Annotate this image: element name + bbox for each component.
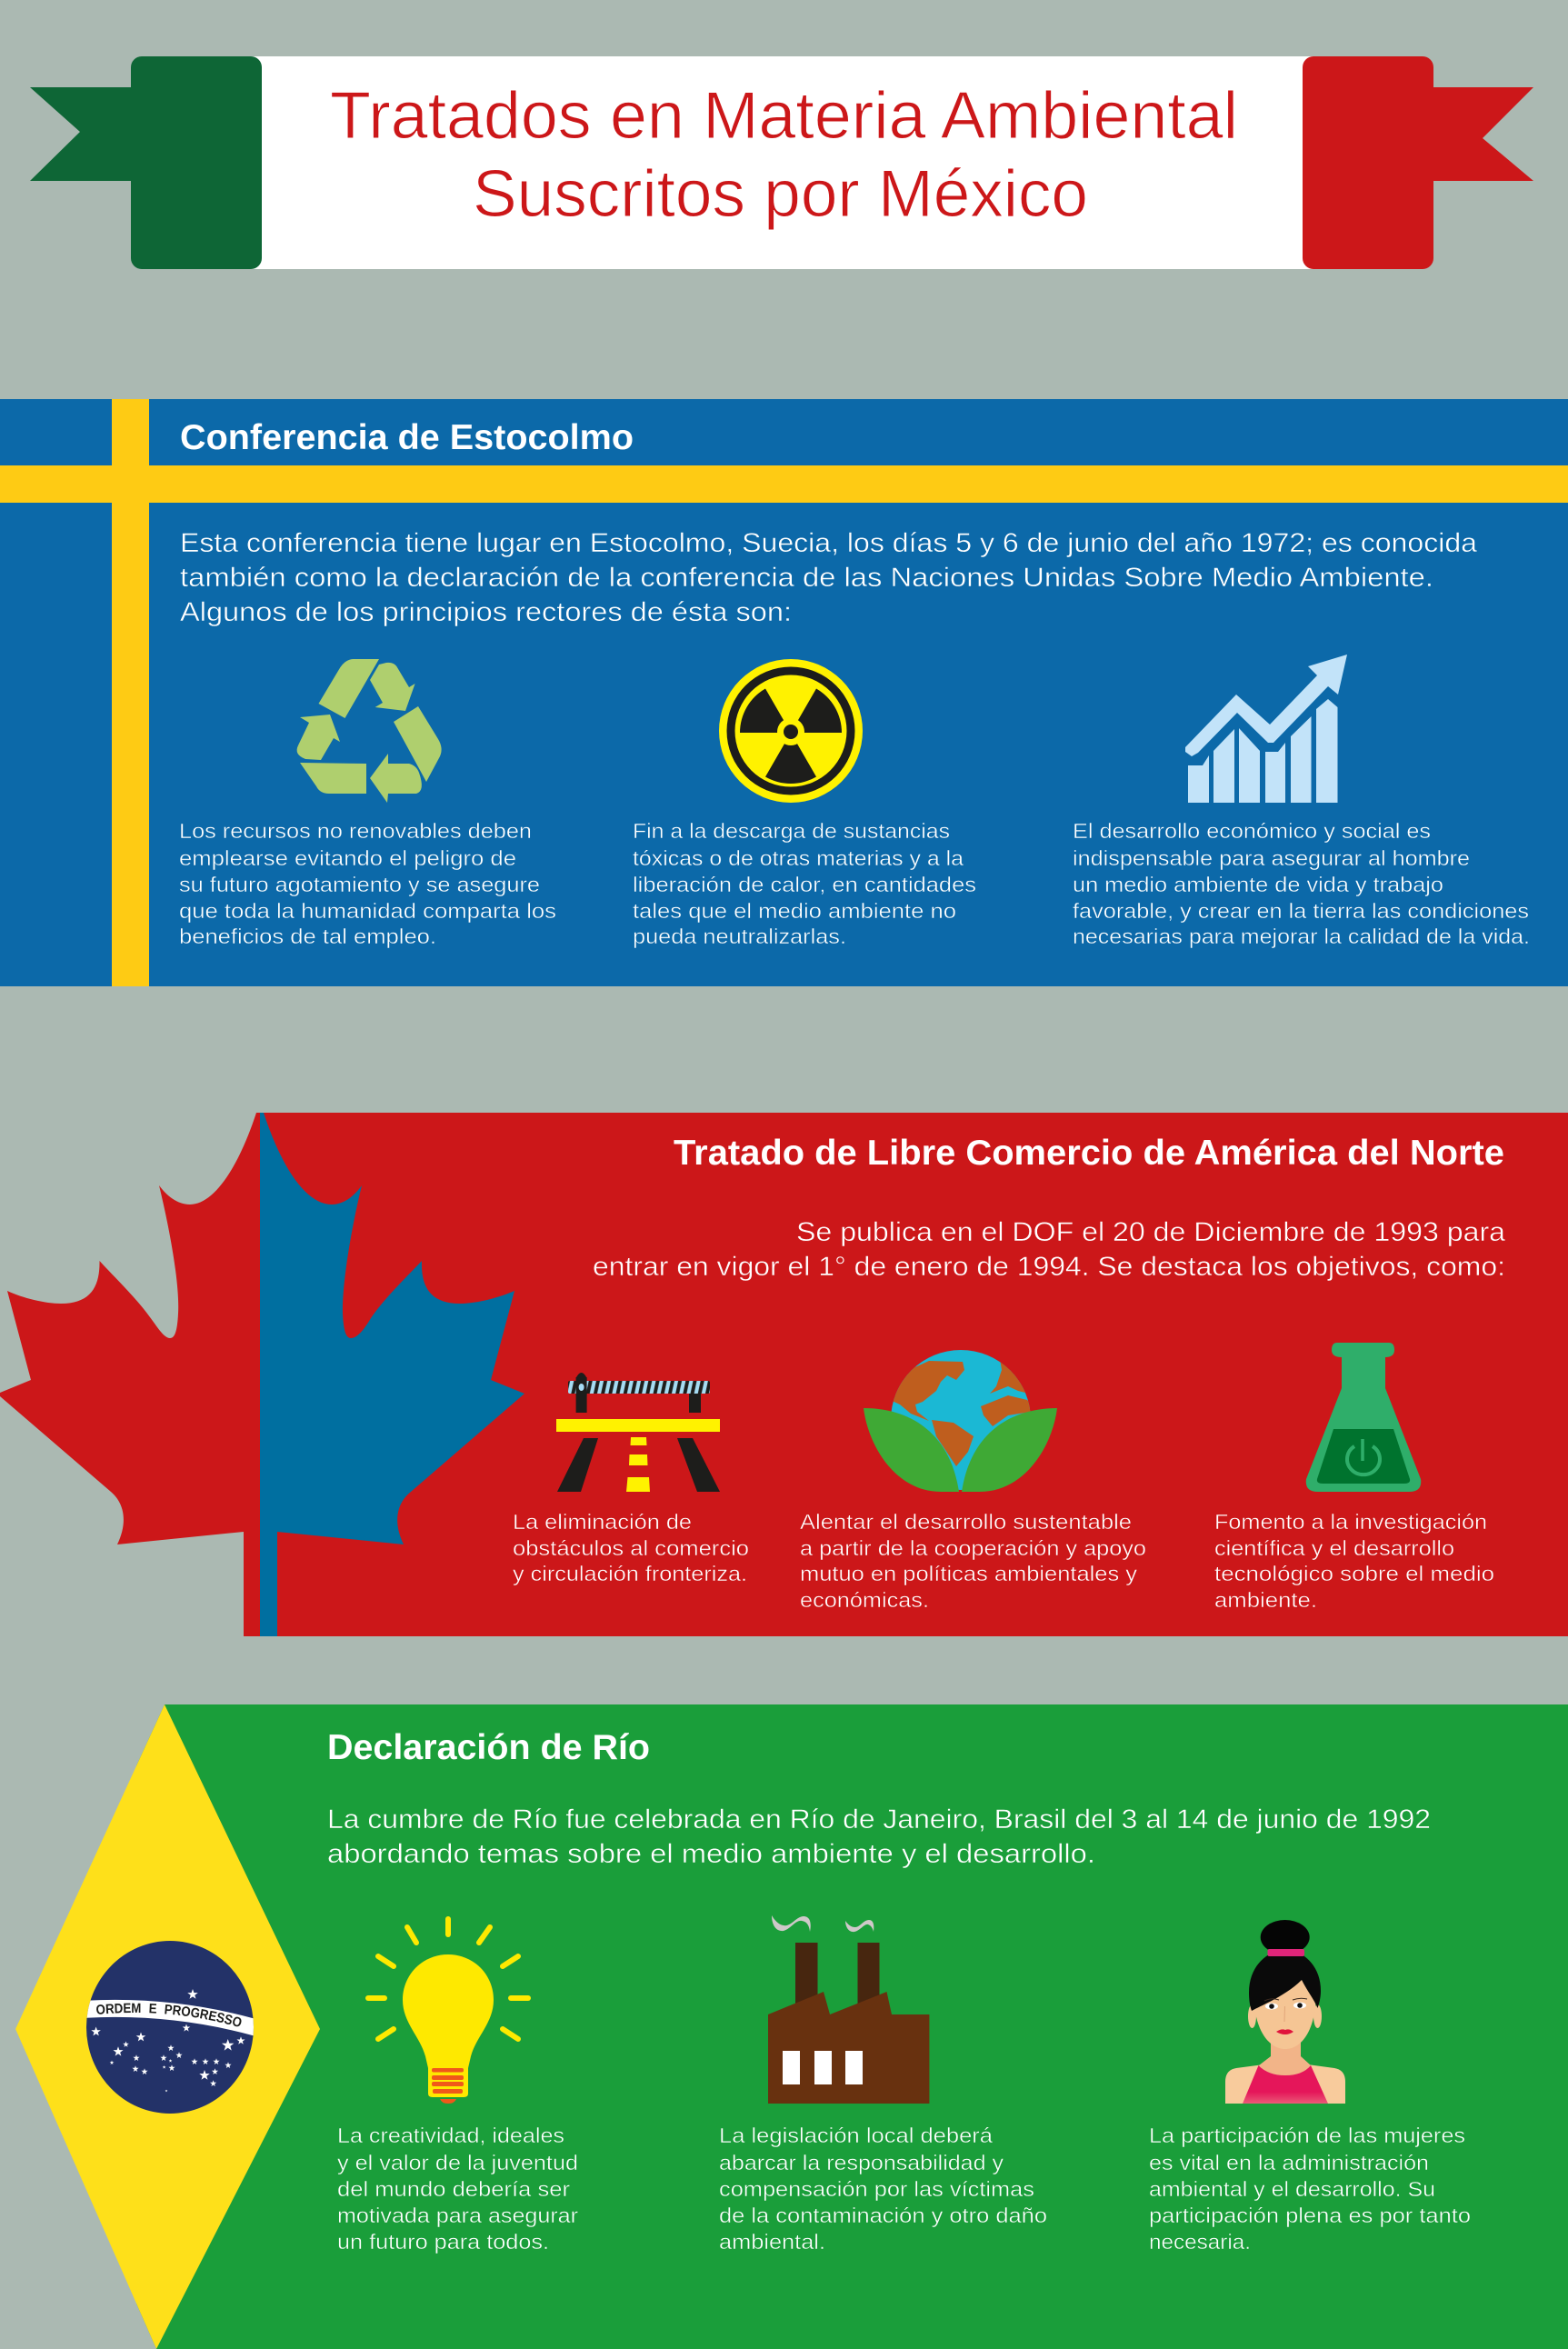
text: desarrollo sustentable — [800, 1510, 1146, 1612]
text: participación mujeres — [1149, 2124, 1471, 2254]
text: eliminación de obstáculos: La eliminación de — [513, 1510, 692, 1534]
Brazil flag globe: ORDEM E PROGRESSO — [96, 2004, 242, 2027]
heading: Tratado de Libre Comercio de América del Norte — [674, 1134, 1504, 1173]
grey corner left of diamond — [0, 1704, 165, 2349]
heading: Conferencia de Estocolmo — [180, 418, 634, 457]
banner red end — [1303, 56, 1433, 269]
text: participación mujeres: La participación de las mujeres — [1149, 2124, 1465, 2147]
intro text: abordando temas sobre el medio ambiente y el desarrollo. — [327, 1839, 1095, 1869]
panel background green — [136, 1704, 1568, 2349]
panel: Declaración de Río — [15, 1704, 1568, 2349]
text: creatividad: del mundo debería ser — [337, 2177, 570, 2201]
title: Tratados en Materia Ambiental — [330, 79, 1238, 153]
text: investigación científica: tecnológico sobre el medio — [1214, 1562, 1494, 1585]
text: desarrollo económico: indispensable para asegurar al hombre — [1073, 846, 1470, 870]
intro text: Se publica en el DOF el 20 de Diciembre de 1993 para — [796, 1217, 1506, 1247]
Swedish cross vertical — [112, 399, 149, 986]
text: sustancias tóxicas: liberación de calor, en cantidades — [633, 873, 976, 896]
text: desarrollo económico: favorable, y crear en la tierra las condiciones — [1073, 899, 1529, 923]
maple leaf blue half — [260, 1113, 524, 1636]
intro text: Algunos de los principios rectores de ésta son: — [180, 597, 792, 627]
text: investigación científica — [1214, 1510, 1494, 1612]
banner green end — [131, 56, 262, 269]
Brazil flag diamond — [15, 1704, 320, 2349]
text: investigación científica: científica y el desarrollo — [1214, 1536, 1454, 1560]
icon: growth chart — [1185, 655, 1347, 803]
title: Suscritos por México — [473, 157, 1088, 231]
text: sustancias tóxicas: tóxicas o de otras materias y a la — [633, 846, 964, 870]
text: desarrollo sustentable: mutuo en políticas ambientales y — [800, 1562, 1137, 1585]
banner white centre — [245, 56, 1323, 269]
text: legislación: ambiental. — [719, 2230, 825, 2254]
text: sustancias tóxicas: pueda neutralizarlas. — [633, 925, 846, 948]
heading: Declaración de Río — [327, 1728, 650, 1767]
intro text: La cumbre de Río fue celebrada en Río de Janeiro, Brasil del 3 al 14 de junio de 1992 — [327, 1804, 1431, 1834]
title banner — [30, 56, 1533, 269]
text: creatividad — [337, 2124, 578, 2254]
icon: globe with leaves — [864, 1350, 1057, 1492]
intro text — [180, 528, 1478, 627]
text: desarrollo sustentable: a partir de la cooperación y apoyo — [800, 1536, 1146, 1560]
stars — [91, 1989, 245, 2092]
text: eliminación de obstáculos: y circulación fronteriza. — [513, 1562, 747, 1585]
intro text: Esta conferencia tiene lugar en Estocolmo, Suecia, los días 5 y 6 de junio del año 1972; es conocida — [180, 528, 1478, 558]
text: creatividad: y el valor de la juventud — [337, 2151, 578, 2174]
panel background blue — [0, 399, 1568, 986]
icon: recycle — [297, 659, 442, 803]
Brazil flag globe — [86, 1941, 254, 2114]
ribbon tail: green — [30, 87, 131, 181]
intro text: entrar en vigor el 1° de enero de 1994. Se destaca los objetivos, como: — [593, 1252, 1505, 1282]
text: legislación — [719, 2124, 1047, 2254]
text: sustancias tóxicas: Fin a la descarga de sustancias — [633, 819, 950, 843]
text: creatividad: un futuro para todos. — [337, 2230, 549, 2254]
text: eliminación de obstáculos — [513, 1510, 749, 1585]
text: legislación: compensación por las víctimas — [719, 2177, 1034, 2201]
panel: Tratado de Libre Comercio — [0, 1113, 1568, 1636]
text: sustancias tóxicas: tales que el medio ambiente no — [633, 899, 956, 923]
text: legislación: La legislación local deberá — [719, 2124, 994, 2147]
text: investigación científica: Fomento a la investigación — [1214, 1510, 1487, 1534]
text: desarrollo sustentable: Alentar el desarrollo sustentable — [800, 1510, 1132, 1534]
ribbon tail: red — [1433, 87, 1533, 181]
text: desarrollo sustentable: económicas. — [800, 1588, 929, 1612]
intro text: también como la declaración de la conferencia de las Naciones Unidas Sobre Medio Ambiente. — [180, 563, 1433, 593]
maple leaf red half — [0, 1113, 261, 1636]
text: sustancias tóxicas — [633, 819, 976, 948]
icon: radiation — [719, 659, 863, 803]
text: participación mujeres: ambiental y el desarrollo. Su — [1149, 2177, 1435, 2201]
text: recursos no renovables: que toda la humanidad comparta los — [179, 899, 556, 923]
text: recursos no renovables: emplearse evitando el peligro de — [179, 846, 516, 870]
icon: flask — [1306, 1343, 1421, 1492]
text: desarrollo económico — [1073, 819, 1530, 948]
text: desarrollo económico: un medio ambiente de vida y trabajo — [1073, 873, 1443, 896]
Swedish cross horizontal — [0, 465, 1568, 503]
text: participación mujeres: necesaria. — [1149, 2230, 1251, 2254]
text: participación mujeres: es vital en la administración — [1149, 2151, 1429, 2174]
text: recursos no renovables: beneficios de tal empleo. — [179, 925, 436, 948]
icon: woman — [1225, 1920, 1345, 2104]
text: eliminación de obstáculos: obstáculos al comercio — [513, 1536, 749, 1560]
text: desarrollo económico: necesarias para mejorar la calidad de la vida. — [1073, 925, 1530, 948]
icon: road barrier — [556, 1373, 720, 1492]
text: investigación científica: ambiente. — [1214, 1588, 1317, 1612]
text: creatividad: motivada para asegurar — [337, 2204, 578, 2227]
panel background red — [260, 1113, 1568, 1636]
text: participación mujeres: participación plena es por tanto — [1149, 2204, 1471, 2227]
text: recursos no renovables: Los recursos no renovables deben — [179, 819, 532, 843]
icon: light bulb — [368, 1919, 528, 2104]
title — [330, 79, 1238, 231]
icon: factory — [768, 1915, 929, 2104]
intro text — [327, 1804, 1431, 1869]
text: creatividad: La creatividad, ideales — [337, 2124, 564, 2147]
text: recursos no renovables: su futuro agotamiento y se asegure — [179, 873, 540, 896]
text: legislación: de la contaminación y otro daño — [719, 2204, 1047, 2227]
panel: Conferencia de Estocolmo — [0, 399, 1568, 986]
intro text — [593, 1217, 1506, 1282]
text: legislación: abarcar la responsabilidad y — [719, 2151, 1004, 2174]
text: recursos no renovables — [179, 819, 556, 948]
text: desarrollo económico: El desarrollo económico y social es — [1073, 819, 1431, 843]
